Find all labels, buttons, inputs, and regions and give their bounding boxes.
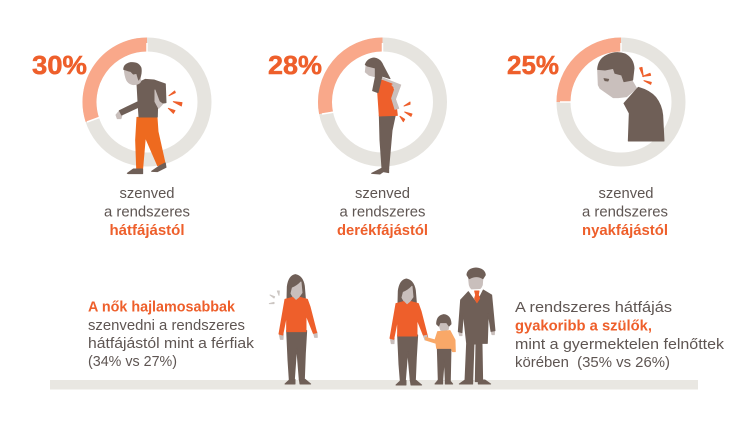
illustration: family: [390, 268, 495, 385]
caption: back pain: hátfájástól: [110, 222, 184, 239]
child: [424, 315, 455, 384]
text block: parents: körében (35% vs 26%): [515, 354, 670, 371]
icon: man with neck pain: [598, 53, 664, 141]
percentage: 30%: 30%: [32, 50, 87, 80]
caption: back pain: [104, 185, 190, 239]
text block: parents: mint a gyermektelen felnőttek: [515, 336, 725, 353]
donut chart: 25%: [560, 43, 678, 160]
father: [458, 268, 495, 384]
donut chart: 28%: [322, 43, 440, 160]
percentage: 28%: 28%: [268, 50, 322, 80]
text block: parents: [515, 299, 725, 371]
caption: lower back pain: derékfájástól: [337, 222, 428, 239]
text block: parents: gyakoribb a szülők,: [515, 318, 652, 334]
caption: neck pain: [582, 185, 668, 239]
text block: women: hátfájástól mint a férfiak: [88, 335, 255, 352]
illustration: woman: [269, 275, 317, 384]
caption: back pain: a rendszeres: [104, 204, 190, 220]
ground band: [50, 380, 698, 390]
text block: parents: A rendszeres hátfájás: [515, 299, 672, 316]
text block: women: A nők hajlamosabbak: [88, 298, 236, 316]
mother: [390, 279, 428, 385]
icon: woman bending with lower back pain: [365, 58, 412, 174]
caption: lower back pain: [337, 185, 428, 239]
percentage: 25%: 25%: [507, 50, 559, 80]
caption: neck pain: nyakfájástól: [582, 222, 668, 239]
panel: neck pain statistic: [507, 43, 678, 239]
panel: back pain statistic: [32, 43, 204, 239]
text block: women: [88, 298, 255, 370]
text block: women: (34% vs 27%): [88, 353, 177, 370]
caption: neck pain: szenved: [598, 185, 654, 202]
icon: man holding his back: [116, 63, 182, 174]
text block: women: szenvedni a rendszeres: [88, 317, 245, 334]
panel: lower back pain statistic: [268, 43, 440, 239]
caption: lower back pain: szenved: [355, 185, 410, 202]
caption: neck pain: a rendszeres: [582, 204, 668, 220]
caption: back pain: szenved: [120, 185, 174, 202]
caption: lower back pain: a rendszeres: [340, 204, 426, 220]
donut chart: 30%: [87, 43, 204, 160]
